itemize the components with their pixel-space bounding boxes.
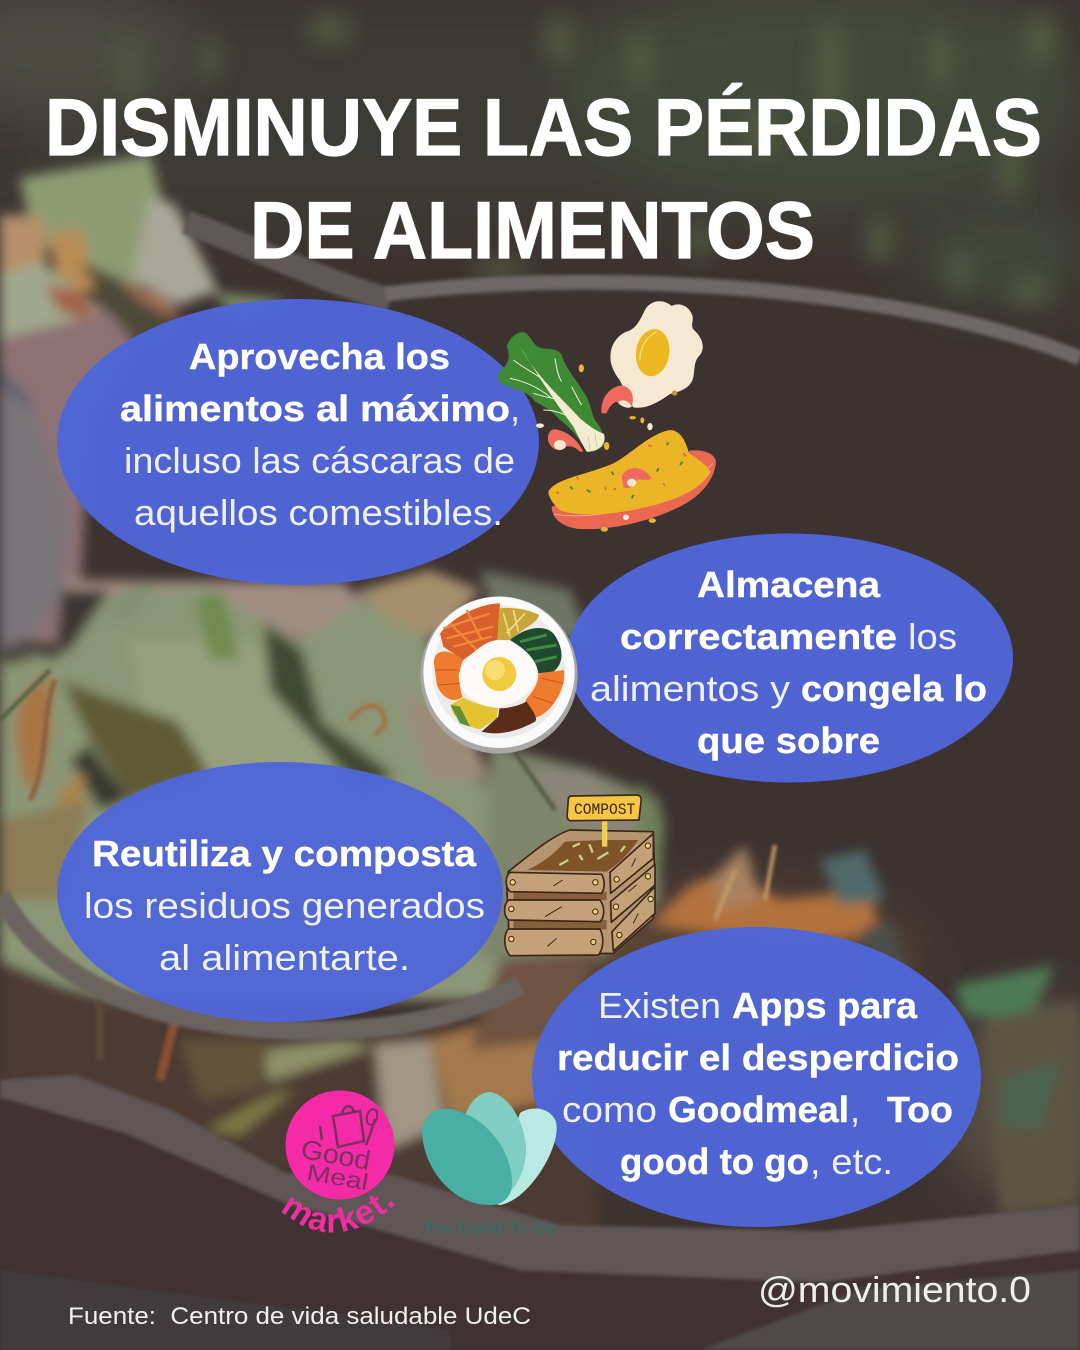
panel: almacena correctamente: los <box>908 616 957 657</box>
handle: @movimiento.0 <box>758 1269 1031 1310</box>
panel: almacena correctamente: correctamente <box>620 616 897 657</box>
icon: bok choy leaf <box>498 332 605 452</box>
panel: reutiliza y composta: al alimentarte. <box>159 937 410 978</box>
bag <box>333 1106 364 1147</box>
panel: aprovecha los alimentos: Aprovecha los <box>189 336 450 377</box>
logo: Good Meal Market: Meal <box>305 1159 370 1195</box>
top foliage spots <box>120 14 1056 304</box>
panel: apps para reducir el desperdicio: Apps para <box>732 985 918 1026</box>
panel: almacena correctamente: congela lo <box>801 668 987 709</box>
panel: reutiliza y composta: los residuos generados <box>84 885 485 926</box>
panel: almacena correctamente: Almacena <box>697 564 881 605</box>
panel: aprovecha los alimentos: aquellos comestibles. <box>134 492 503 533</box>
panel: almacena correctamente: que sobre <box>697 720 880 761</box>
logo: Too Good To Go <box>422 1092 557 1237</box>
panel: apps para reducir el desperdicio: Goodmeal <box>668 1089 849 1130</box>
panel: apps para reducir el desperdicio: reducir el desperdicio <box>557 1037 959 1078</box>
panel: aprovecha los alimentos: alimentos al máximo <box>120 388 510 429</box>
green leaves <box>0 585 560 1000</box>
panel: almacena correctamente: alimentos y <box>590 668 790 709</box>
logo: Good Meal Market <box>281 1090 394 1232</box>
panel: apps para reducir el desperdicio: good to go <box>620 1141 809 1182</box>
panel: apps para reducir el desperdicio: Existen <box>598 985 721 1026</box>
panel: aprovecha los alimentos: , <box>510 388 520 429</box>
icon: bibimbap bowl <box>420 596 578 754</box>
orange scraps lower right <box>650 870 880 945</box>
compost sign: COMPOST <box>574 801 635 819</box>
bowl food <box>434 603 564 733</box>
panel: apps para reducir el desperdicio: , etc. <box>810 1141 893 1182</box>
crate planks <box>505 833 655 956</box>
icon: fried egg <box>610 301 703 408</box>
icon: shrimp <box>601 386 633 413</box>
panel: apps para reducir el desperdicio: Too <box>887 1089 953 1130</box>
logo: Good Meal Market: Good <box>299 1134 373 1176</box>
icon: plate with rice <box>536 364 716 532</box>
source: Fuente: Centro de vida saludable UdeC <box>68 1303 531 1330</box>
panel: aprovecha los alimentos: incluso las cáscaras de <box>124 440 515 481</box>
panel: apps para reducir el desperdicio: , <box>850 1089 860 1130</box>
title <box>45 82 1042 276</box>
front edge of bin <box>0 1075 1080 1350</box>
pot rims <box>186 222 390 300</box>
panel: apps para reducir el desperdicio <box>532 927 981 1227</box>
panel: almacena correctamente <box>567 534 1013 782</box>
logo: Too Good To Go: Too Good To Go <box>423 1220 557 1237</box>
compost middle <box>0 950 600 1250</box>
panel: reutiliza y composta: Reutiliza y composta <box>92 833 477 874</box>
icon: food with egg, leaf, shrimp and rice <box>498 301 716 532</box>
panel: reutiliza y composta <box>57 762 503 1022</box>
crate backdrop <box>480 745 660 960</box>
panel: aprovecha los alimentos <box>57 299 539 585</box>
strands and stems <box>0 222 1080 1080</box>
logo: Good Meal Market: market. <box>281 1194 394 1232</box>
title: DE ALIMENTOS <box>250 186 815 276</box>
icon: compost crate <box>505 795 655 956</box>
panel: apps para reducir el desperdicio: como <box>562 1089 657 1130</box>
compost sign <box>567 795 641 821</box>
